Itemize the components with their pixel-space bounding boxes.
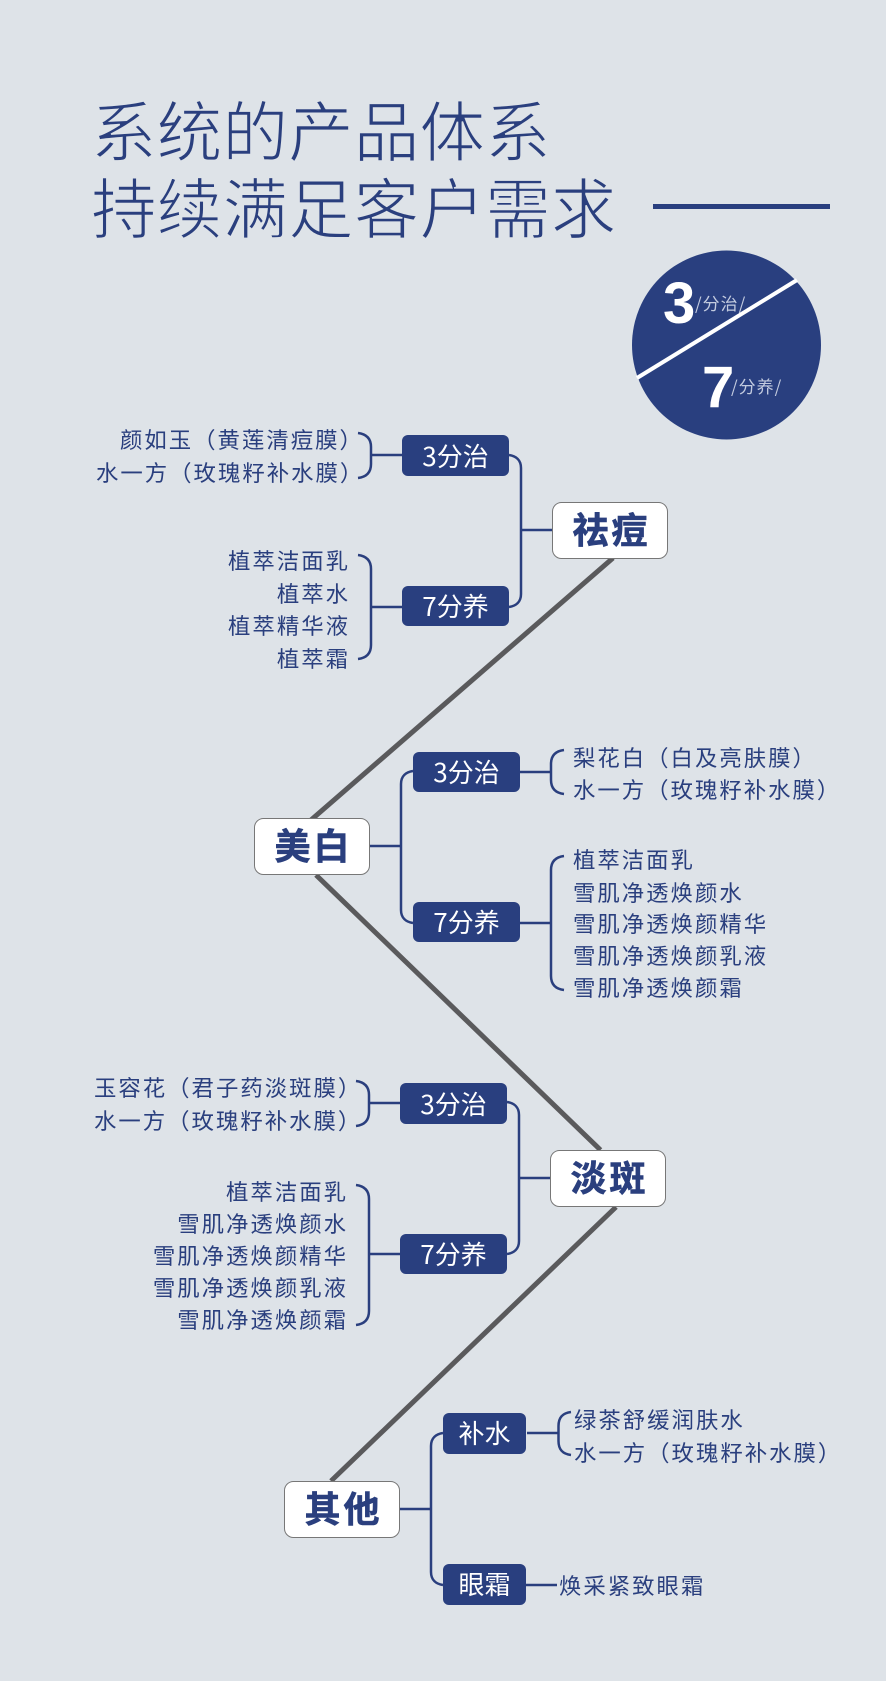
list: 7分养 products: 植萃精华液 [228,609,350,641]
node: 淡斑 [550,1150,666,1206]
list: 7分养 products: 雪肌净透焕颜乳液 [153,1271,348,1303]
list: 3分治 products: 颜如玉（黄莲清痘膜） [120,423,364,455]
node: 其他 [284,1481,400,1538]
node: 美白 [254,818,370,874]
pill: 7分养: 7分养 [433,903,500,940]
pill: 3分治 [413,752,520,792]
panel: 祛痘 [96,423,668,674]
list: 3分治 products [573,741,841,805]
panel: 其他 [284,1403,842,1605]
badge: 3 part treat, 7 part nourish: 7 [702,355,734,420]
list: 3分治 products: 水一方（玫瑰籽补水膜） [573,773,841,805]
list: 7分养 products: 雪肌净透焕颜水 [573,876,744,908]
pill: 3分治 [400,1083,507,1124]
list: 3分治 products: 水一方（玫瑰籽补水膜） [94,1104,362,1136]
list: 补水 products: 绿茶舒缓润肤水 [574,1403,745,1435]
node: 淡斑: 淡斑 [570,1150,649,1202]
pill: 眼霜 [443,1564,526,1605]
list: 7分养 products: 雪肌净透焕颜霜 [177,1303,348,1335]
connectors: 其他 [399,1412,571,1585]
list: 7分养 products: 植萃洁面乳 [228,544,350,576]
pill: 7分养: 7分养 [422,587,489,624]
pill: 3分治 [402,435,509,476]
node: 美白: 美白 [274,818,353,870]
list: 7分养 products [153,1175,348,1335]
badge: 3 part treat, 7 part nourish [632,250,821,440]
pill: 补水: 补水 [458,1414,511,1451]
list: 7分养 products: 植萃水 [277,577,350,609]
node: 其他: 其他 [304,1481,383,1533]
panel: 淡斑 [94,1071,666,1335]
pill: 3分治: 3分治 [422,437,489,474]
list: 7分养 products [573,843,768,1003]
list: 眼霜 products: 焕采紧致眼霜 [559,1569,705,1601]
header rule [653,204,830,209]
badge: 3 part treat, 7 part nourish: /分养/ [731,373,782,398]
list: 7分养 products: 雪肌净透焕颜乳液 [573,939,768,971]
connectors: 祛痘 [358,433,553,659]
pill: 7分养 [400,1234,507,1274]
list: 7分养 products: 雪肌净透焕颜霜 [573,971,744,1003]
node: 祛痘: 祛痘 [572,502,651,554]
node: 祛痘 [552,502,668,558]
pill: 3分治: 3分治 [420,1085,487,1122]
list: 3分治 products: 水一方（玫瑰籽补水膜） [96,456,364,488]
list: 7分养 products: 雪肌净透焕颜水 [177,1207,348,1239]
list: 7分养 products [228,544,350,674]
list: 3分治 products: 梨花白（白及亮肤膜） [573,741,817,773]
title [91,80,616,252]
panel: 美白 [254,741,841,1003]
list: 补水 products [574,1403,842,1468]
list: 7分养 products: 雪肌净透焕颜精华 [573,907,768,939]
badge: 3 part treat, 7 part nourish: /分治/ [695,290,746,315]
list: 7分养 products: 雪肌净透焕颜精华 [153,1239,348,1271]
pill: 7分养: 7分养 [420,1235,487,1272]
title: 系统的产品体系 [91,80,551,175]
connectors: 美白 [370,750,564,990]
connectors: 淡斑 [356,1081,550,1325]
list: 7分养 products: 植萃霜 [277,642,350,674]
list: 7分养 products: 植萃洁面乳 [226,1175,348,1207]
list: 7分养 products: 植萃洁面乳 [573,843,695,875]
title: 持续满足客户需求 [91,157,616,252]
list: 3分治 products [94,1071,362,1136]
pill: 7分养 [402,586,509,626]
pill: 7分养 [413,902,520,942]
list: 3分治 products: 玉容花（君子药淡斑膜） [94,1071,362,1103]
list: 3分治 products [96,423,364,488]
badge: 3 part treat, 7 part nourish: 3 [663,271,695,336]
zigzag spine [311,558,616,1481]
pill: 补水 [443,1413,526,1454]
pill: 3分治: 3分治 [433,753,500,790]
list: 补水 products: 水一方（玫瑰籽补水膜） [574,1436,842,1468]
pill: 眼霜: 眼霜 [458,1565,511,1602]
